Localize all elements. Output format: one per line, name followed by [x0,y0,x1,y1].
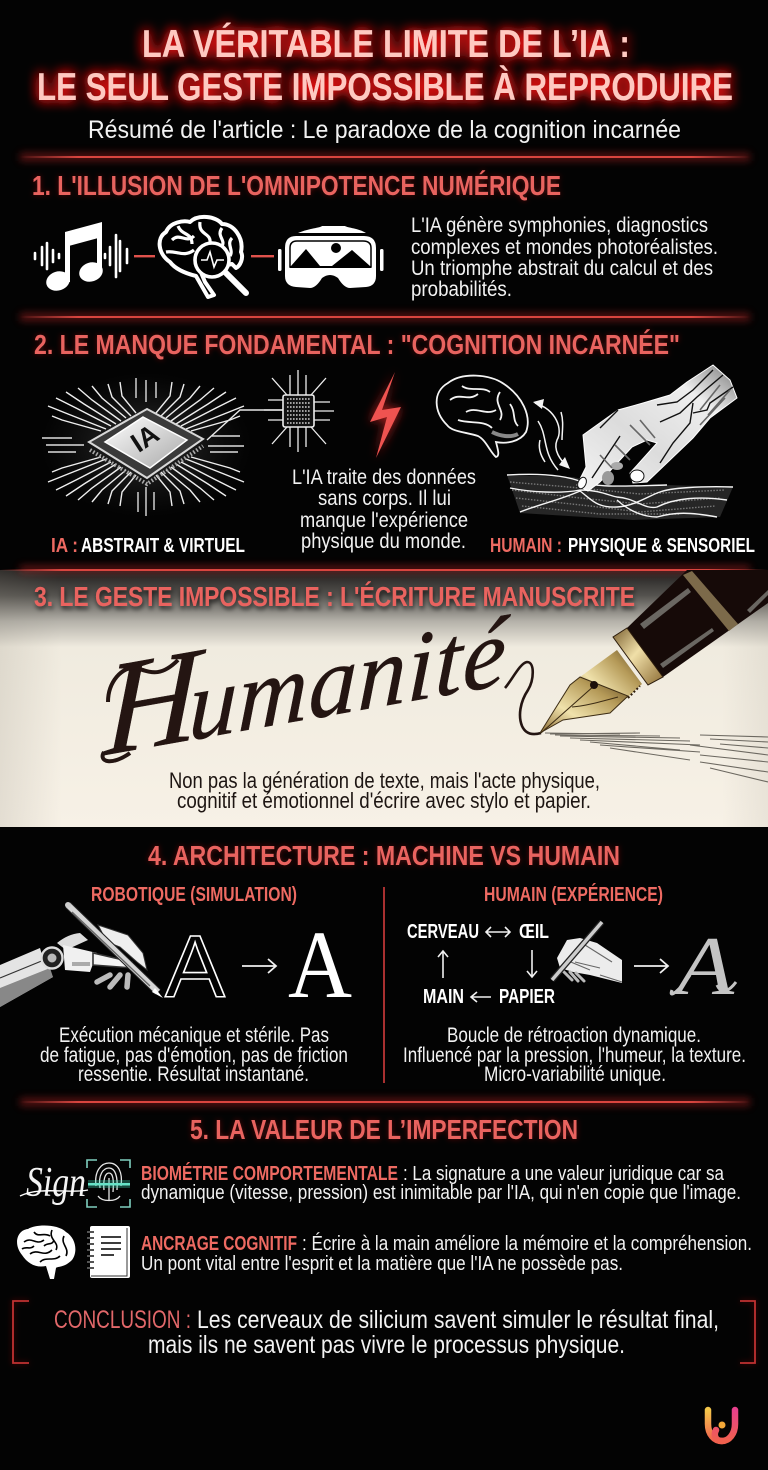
icon: notebook [87,1226,130,1278]
text: biometrie: BIOMÉTRIE COMPORTEMENTALE [141,1162,398,1185]
callout: conclusion [13,1301,755,1363]
subheading: ROBOTIQUE (SIMULATION) [91,884,297,906]
text block [40,1024,348,1086]
icon: IA processor chip: IA [125,418,164,458]
divider [20,153,750,161]
text: biometrie [141,1162,741,1204]
text block: Non pas la génération de texte, mais l'acte physique, [169,768,600,793]
text block [292,466,476,553]
script word: H [100,617,208,785]
feedback loop diagram [407,921,555,1008]
feedback loop diagram: ŒIL [519,921,549,943]
label: Humain [490,535,755,557]
icon: fountain pen [540,570,768,733]
arrow [242,959,276,973]
divider [20,313,750,321]
icon: brain [17,1226,75,1279]
text block [169,768,600,813]
serif letter A: A [288,911,352,1018]
panel: section 3, paper [0,564,768,827]
pen shadow hatching [545,733,768,782]
icon: hand touching texture [507,365,737,520]
feedback loop diagram: MAIN [423,986,464,1008]
icon: signature with fingerprint: Sign [26,1160,86,1206]
text block: Exécution mécanique et stérile. Pas [59,1024,329,1047]
script word: umanité [187,596,512,763]
text: ancrage: Un pont vital entre l'esprit et la matière que l'IA ne possède pas. [141,1253,623,1275]
icon: feedback arrows [533,399,570,470]
panel: section 4 [0,840,746,1086]
brackets [13,1301,755,1363]
feedback loop diagram: PAPIER [499,986,555,1008]
text block: manque l'expérience [300,509,468,532]
icon: IA processor chip [41,373,251,517]
label: IA: ABSTRAIT & VIRTUEL [81,535,245,557]
right column: human [403,883,746,1086]
title [37,22,733,109]
divider [20,1098,750,1106]
text: ancrage [141,1232,752,1275]
icon: music note with sound waves [35,222,127,294]
connector [251,255,274,257]
label: IA [51,535,245,557]
icon: signature with fingerprint [20,1160,130,1207]
text block [403,1024,746,1086]
script word [100,564,541,785]
panel: section 1 [32,170,718,301]
icon: small chip with circuit [207,370,334,452]
hand [577,365,737,491]
text block: sans corps. Il lui [318,487,451,510]
label: Humain: HUMAIN : [490,535,562,557]
conclusion text: mais ils ne savent pas vivre le processus physique. [148,1331,625,1359]
subheading: HUMAIN (EXPÉRIENCE) [484,883,663,906]
text block: de fatigue, pas d'émotion, pas de friction [40,1044,348,1067]
label: IA: IA : [51,535,78,557]
icon: VR headset [278,226,384,288]
text block: Un triomphe abstrait du calcul et des [411,257,713,280]
text block: complexes et mondes photoréalistes. [411,236,718,259]
text block: Micro-variabilité unique. [484,1063,666,1086]
arrow [634,959,668,973]
icon: hand writing [552,922,622,983]
text block: L'IA traite des données [292,466,476,489]
text block [411,214,718,301]
heading 3: 3. LE GESTE IMPOSSIBLE : L'ÉCRITURE MANUSCRITE [34,581,635,612]
icon: brain with magnifier [160,217,246,297]
left column: robotics [0,884,352,1086]
text block: L'IA génère symphonies, diagnostics [411,214,708,237]
text block: ressentie. Résultat instantané. [78,1063,309,1086]
conclusion text [54,1306,719,1359]
panel: section 2 [34,329,755,557]
feedback loop diagram: CERVEAU [407,921,479,943]
text block: Boucle de rétroaction dynamique. [447,1024,701,1047]
icon: logo [708,1410,735,1441]
text block: cognitif et émotionnel d'écrire avec stylo et papier. [177,788,591,813]
heading 5: 5. LA VALEUR DE L’IMPERFECTION [190,1114,578,1145]
icon: brain outline [437,376,528,457]
sensory texture [507,475,733,520]
title: LA VÉRITABLE LIMITE DE L’IA : [142,22,630,66]
heading 1: 1. L'ILLUSION DE L'OMNIPOTENCE NUMÉRIQUE [32,170,561,201]
icon: lightning bolt [370,372,401,458]
panel: section 5 [13,1114,755,1363]
heading 4: 4. ARCHITECTURE : MACHINE VS HUMAIN [148,840,620,871]
conclusion text: CONCLUSION : [54,1306,191,1334]
script letter A: A [670,920,735,1013]
text block: physique du monde. [301,530,466,553]
icon: robot arm with pen [0,902,163,1007]
column divider [383,887,385,1083]
subtitle: Résumé de l'article : Le paradoxe de la cognition incarnée [88,116,681,144]
outlined letter A: A [165,917,225,1016]
connector [134,255,155,257]
text: ancrage: ANCRAGE COGNITIF [141,1233,297,1255]
text block: probabilités. [411,278,512,301]
